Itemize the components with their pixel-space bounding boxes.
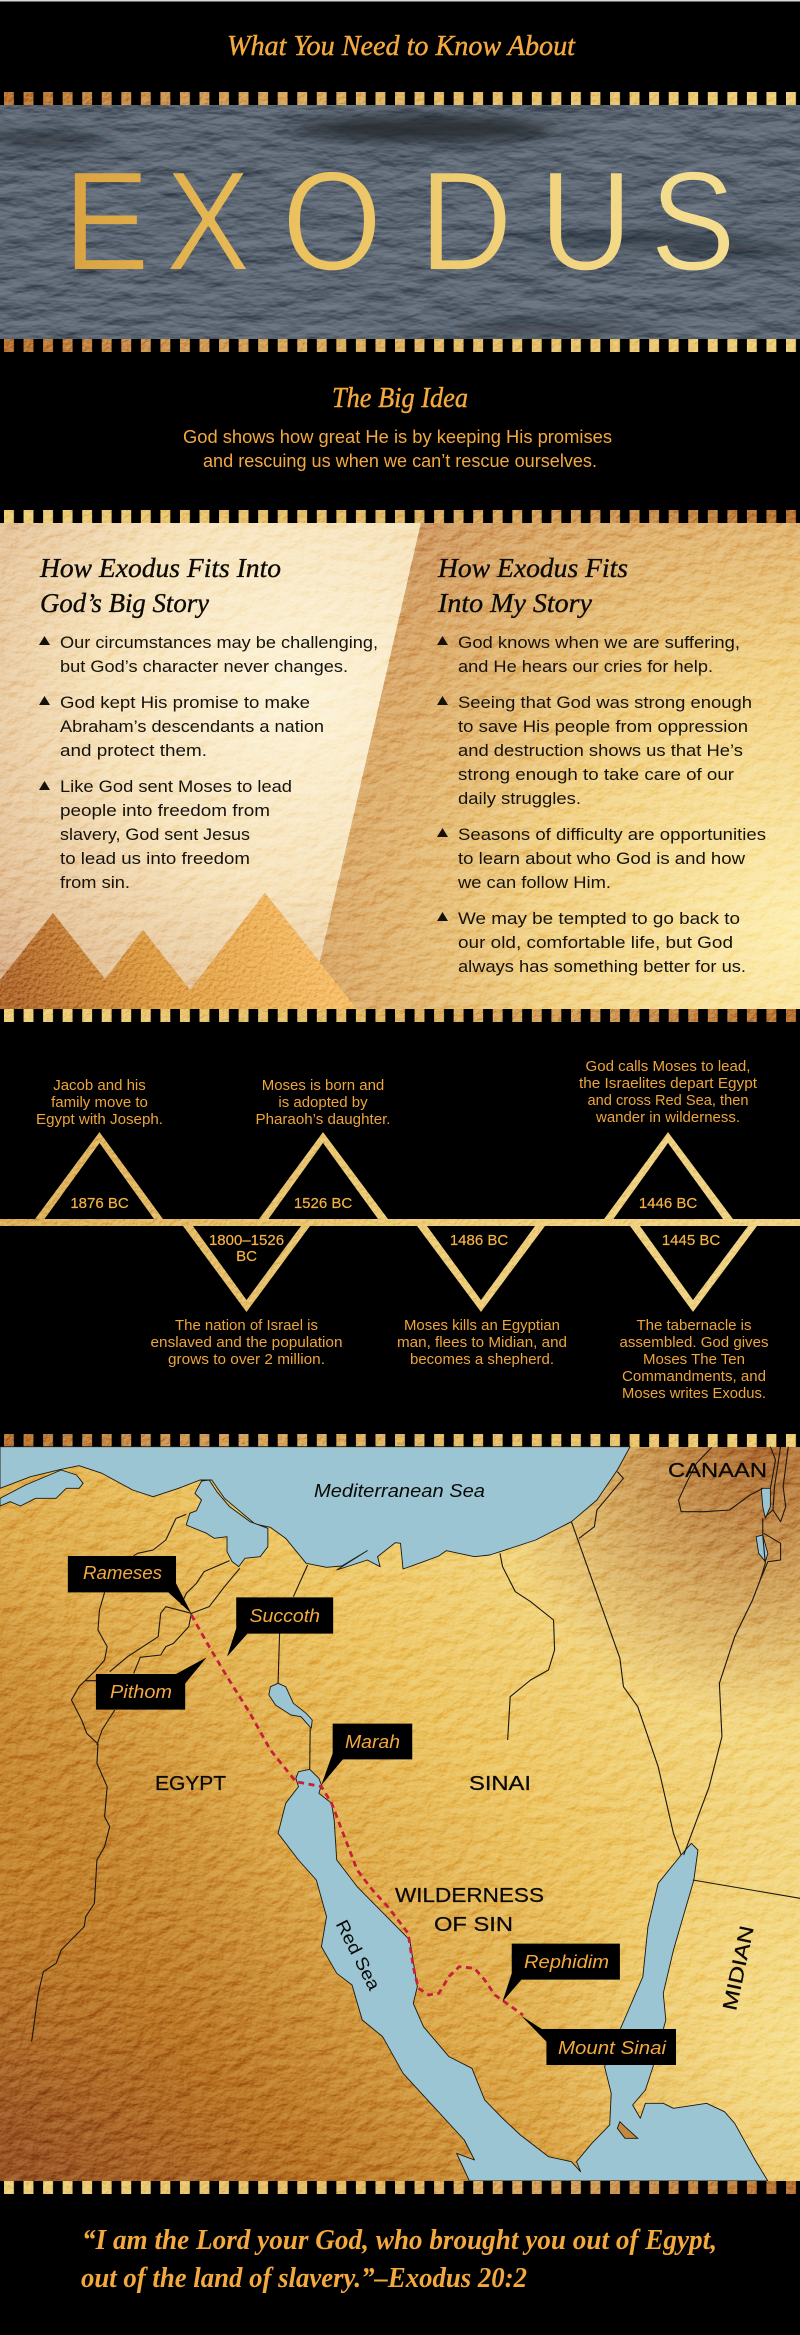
event: 1446 BC: and cross Red Sea, then [588,1092,748,1109]
event: 1486 BC [397,1232,567,1368]
event: 1876 BC: Jacob and his [53,1077,146,1094]
event: 1486 BC: Moses kills an Egyptian [404,1317,560,1334]
heading: Into My Story [437,588,592,618]
bullet list: daily struggles. [458,789,581,808]
map label: Wilderness of Sin [395,1885,544,1936]
closing quote: out of the land of slavery.”–Exodus 20:2 [81,2263,527,2294]
panel background [0,523,800,1009]
bullet list [39,633,378,892]
bullet list: but God’s character never changes. [60,657,348,676]
land [0,1447,800,2181]
callout: Mount Sinai: Mount Sinai [558,2038,667,2058]
event: 1526 BC: Pharaoh’s daughter. [256,1111,390,1128]
rivers and borders [32,1447,800,2042]
sea: inland lakes [756,1488,770,1562]
sea: Mediterranean [0,1447,630,1570]
timeline axis and triangles [0,1132,800,1312]
callout: Marah: Marah [345,1732,400,1752]
event: 1800–1526 BC: 1800–1526 [209,1232,284,1249]
heading: the big idea: The Big Idea [332,383,468,414]
film strip: above story panel [0,510,800,523]
bullet list: We may be tempted to go back to [458,909,740,928]
big idea text [183,427,612,471]
bullet list: Seeing that God was strong enough [458,693,752,712]
heading: God’s Big Story [40,588,209,618]
big idea block [183,383,612,471]
event: 1526 BC: Moses is born and [262,1077,384,1094]
bullet list: to lead us into freedom [60,849,250,868]
bullet list: our old, comfortable life, but God [458,933,733,952]
bullet list: Seasons of difficulty are opportunities [458,825,766,844]
callout: Rephidim: Rephidim [524,1952,609,1972]
sea: island [617,2122,638,2138]
event: 1486 BC: 1486 BC [450,1232,508,1249]
event: 1800–1526 BC [150,1232,342,1368]
event: 1446 BC: 1446 BC [639,1195,697,1212]
map label: Mediterranean Sea: Mediterranean Sea [314,1481,485,1501]
bullet list [437,633,766,976]
route: dashed red exodus path [191,1615,523,2015]
event: 1800–1526 BC: BC [236,1248,257,1265]
event: 1446 BC: God calls Moses to lead, [586,1058,750,1075]
callout: Rameses [68,1556,191,1613]
map label: Midian: MIDIAN [719,1924,759,2013]
bullet list: people into freedom from [60,801,270,820]
bullet list: we can follow Him. [457,873,611,892]
event: 1800–1526 BC: The nation of Israel is [175,1317,318,1334]
event: 1876 BC: Egypt with Joseph. [36,1111,163,1128]
column: my story [437,553,766,976]
closing quote: “I am the Lord your God, who brought you out of Egypt, [82,2225,717,2256]
hero banner: water with EXODUS [0,105,800,339]
event: 1876 BC: family move to [51,1094,148,1111]
bullet list: and He hears our cries for help. [458,657,713,676]
callout: Succoth: Succoth [250,1606,320,1626]
bullet list: always has something better for us. [458,957,746,976]
bullet list: Our circumstances may be challenging, [60,633,378,652]
heading: How Exodus Fits Into [39,553,281,583]
event: 1446 BC: wander in wilderness. [595,1109,740,1126]
event: 1445 BC: Moses writes Exodus. [622,1385,766,1402]
map label: Canaan: CANAAN [668,1460,767,1482]
title: What You Need to Know About [227,31,576,62]
closing quote [81,2225,717,2294]
callout: Pithom: Pithom [110,1682,172,1702]
big idea text: God shows how great He is by keeping His promises [183,427,612,447]
left light wedge [0,523,421,1009]
column: God's big story [39,553,378,892]
bullet list: God knows when we are suffering, [458,633,740,652]
event: 1526 BC: 1526 BC [294,1195,352,1212]
bullet list: strong enough to take care of our [458,765,734,784]
bullet list: God kept His promise to make [60,693,310,712]
panel: story [0,523,800,1009]
callout: Rameses: Rameses [83,1563,162,1583]
icon: pyramids [0,893,357,1009]
event: 1446 BC: the Israelites depart Egypt [579,1075,758,1092]
film strip: below map [0,2181,800,2194]
map label: Sinai: SINAI [469,1773,531,1795]
callout: Rephidim [503,1944,620,2002]
event: 1526 BC: is adopted by [278,1094,368,1111]
film strip: below story panel [0,1009,800,1022]
heading [437,553,628,618]
event: 1486 BC: becomes a shepherd. [410,1351,554,1368]
sea: coastal lagoons [0,1470,268,1567]
event: 1445 BC: assembled. God gives [620,1334,768,1351]
map label: Wilderness of Sin: OF SIN [434,1914,513,1936]
bullet list: Like God sent Moses to lead [60,777,292,796]
event: 1445 BC: The tabernacle is [636,1317,752,1334]
callout: Marah [321,1724,412,1785]
heading: EXODUS: EXODUS [64,142,735,300]
film strip: above map [0,1434,800,1447]
event: 1876 BC [36,1077,163,1212]
film strip: above banner [0,92,800,105]
heading: How Exodus Fits [437,553,628,583]
water texture [0,105,800,339]
event: 1445 BC [620,1232,768,1402]
callout: Succoth [227,1597,333,1657]
bullet list: and destruction shows us that He’s [458,741,743,760]
sea: Bitter Lakes [269,1683,312,1728]
event: 1445 BC: Commandments, and [622,1368,766,1385]
film strip: below banner [0,339,800,352]
event: 1800–1526 BC: grows to over 2 million. [168,1351,325,1368]
map label: Egypt: EGYPT [155,1773,226,1795]
map [0,1447,800,2181]
event: 1486 BC: man, flees to Midian, and [397,1334,567,1351]
callout: Mount Sinai [521,2016,676,2065]
bullet list: to learn about who God is and how [458,849,746,868]
event: 1446 BC [579,1058,758,1212]
event: 1800–1526 BC: enslaved and the population [150,1334,342,1351]
big idea text: and rescuing us when we can’t rescue ourselves. [203,451,597,471]
timeline [0,1058,800,1402]
bullet list: Abraham’s descendants a nation [60,717,324,736]
event: 1445 BC: Moses The Ten [643,1351,745,1368]
bullet list: from sin. [60,873,130,892]
heading [39,553,281,618]
bullet list: to save His people from oppression [458,717,748,736]
callout: Pithom [96,1657,207,1710]
map label: Wilderness of Sin: WILDERNESS [395,1885,544,1907]
bullet list: slavery, God sent Jesus [60,825,250,844]
event: 1526 BC [256,1077,390,1212]
bullet list: and protect them. [60,741,207,760]
event: 1876 BC: 1876 BC [70,1195,129,1212]
map label: Red Sea: Red Sea [332,1917,385,1994]
event: 1445 BC: 1445 BC [662,1232,720,1249]
sea: Red Sea and gulfs [278,1769,768,2181]
